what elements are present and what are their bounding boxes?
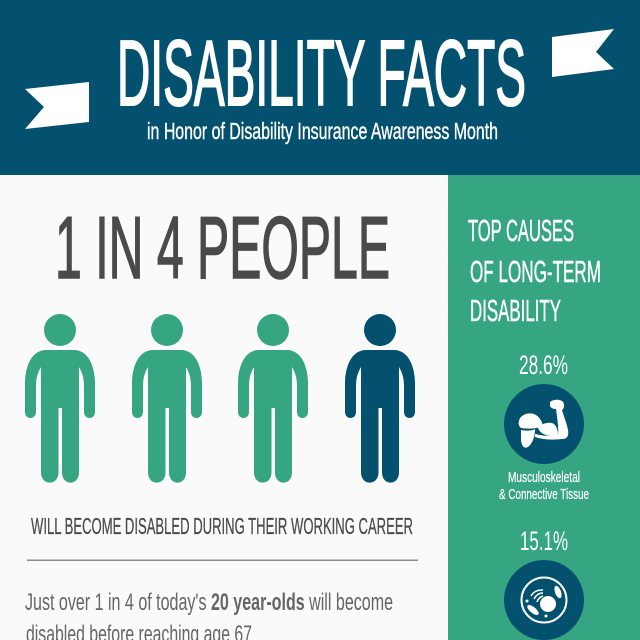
icon: muscle	[504, 384, 584, 464]
label: musculoskeletal: & Connective Tissue	[499, 486, 589, 503]
icon: person 3	[238, 314, 308, 483]
header banner	[0, 0, 640, 175]
left ribbon	[25, 82, 89, 129]
body text: Just over 1 in 4 of today's 20 year-olds will become	[25, 589, 393, 616]
icon: person 4	[345, 314, 415, 483]
icon: person 1	[25, 314, 95, 483]
stat: 28.6 percent: 28.6%	[519, 350, 568, 380]
icon: cell	[504, 560, 584, 640]
label: musculoskeletal: Musculoskeletal	[508, 469, 580, 486]
right ribbon	[552, 29, 614, 77]
label: musculoskeletal	[499, 469, 589, 503]
icon: person 2	[132, 314, 202, 483]
panel heading: DISABILITY	[470, 293, 561, 328]
subtitle: in Honor of Disability Insurance Awareness Month	[147, 118, 498, 144]
body text	[25, 589, 393, 640]
panel: top causes	[448, 175, 640, 640]
panel heading	[468, 213, 601, 328]
stat: 15.1 percent: 15.1%	[520, 526, 568, 556]
